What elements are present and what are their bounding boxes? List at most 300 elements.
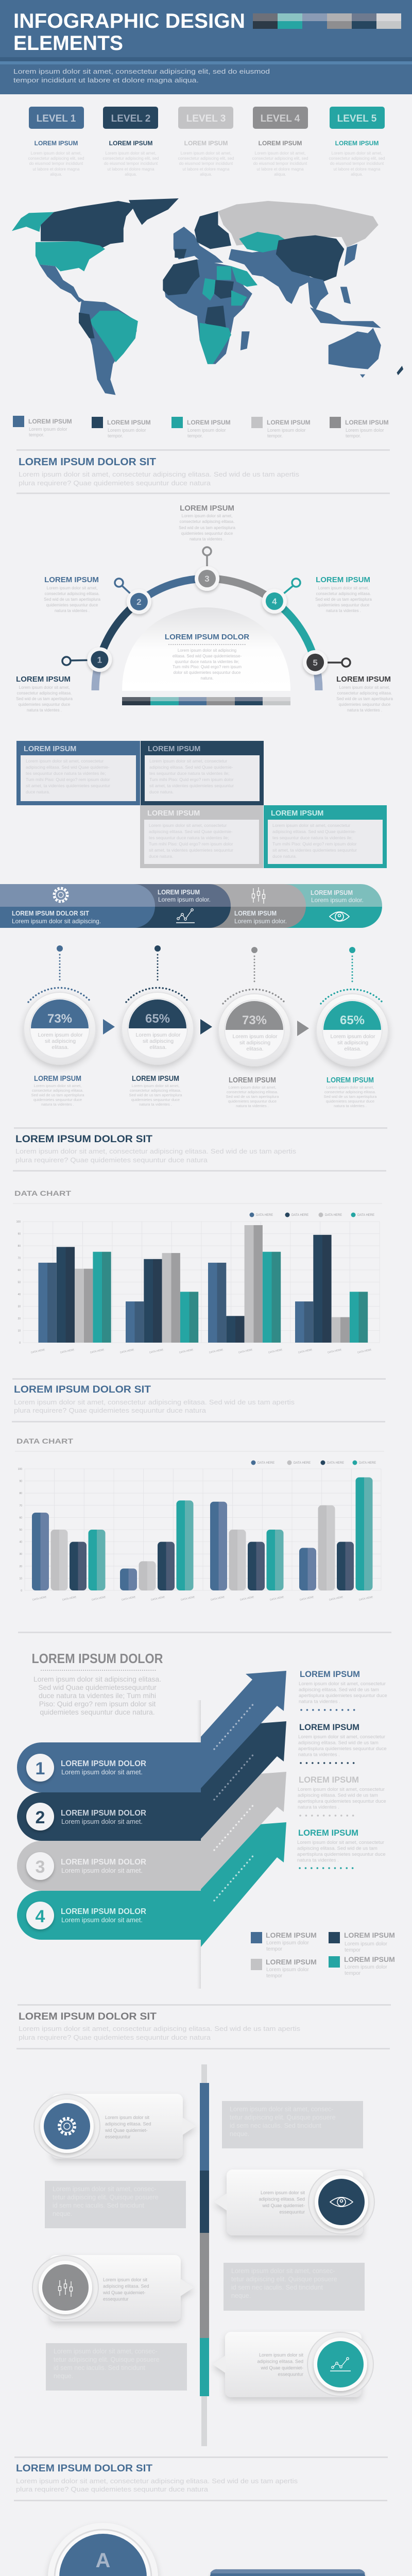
bar chart 1: 70 [18, 1257, 21, 1260]
box 3: adipiscing elitasa. Sed wid Quae quidemie- [149, 829, 233, 834]
level 3: LOREM IPSUM [184, 140, 228, 147]
box 3: LOREM IPSUM [147, 809, 200, 818]
bar chart 1: DATA HERE [328, 1348, 342, 1354]
arrow text items: adipiscing elitasa. Sed wid de us tam [297, 1845, 377, 1852]
box 1: duce natura. [26, 789, 50, 794]
arrow legend: tempor [345, 1971, 361, 1976]
box 2: Tum mihi Piso: Quid ergo? rem ipsum dolor [149, 777, 234, 782]
circle 65% teal: elitasa. [344, 1046, 362, 1052]
level 4: LOREM IPSUM [259, 140, 302, 147]
bar chart 2: DATA HERE [32, 1596, 47, 1602]
level 3: Lorem ipsum dolor sit amet, [181, 151, 231, 156]
map legend: tempor. [346, 433, 361, 438]
banner texts: LOREM IPSUM [311, 889, 353, 896]
circle labels: natura ta videntes . [41, 1102, 74, 1107]
circle labels: LOREM IPSUM [327, 1076, 374, 1084]
level 4: ut labore et dolore magna [256, 167, 304, 172]
tab 2: LOREM IPSUM DOLOR [61, 1809, 146, 1818]
semicircle gauge [62, 547, 350, 705]
intro text [32, 1651, 163, 1716]
box 3: sit amet, ta videntes quidemietes sequuntur [149, 848, 233, 853]
tab 2 [17, 1792, 201, 1841]
label 3 [179, 504, 235, 541]
tab 4: Lorem ipsum dolor sit amet. [61, 1917, 143, 1924]
label 2: consectetur adipiscing elitasa. [45, 591, 99, 596]
banner texts: Lorem ipsum dolor. [158, 896, 211, 903]
circle labels: consectetur adipiscing elitasa. [324, 1090, 376, 1094]
heading: timeline section: plura requirere? Quae quidemietes sequuntur duce natura [19, 2034, 211, 2041]
box 1: Tum mihi Piso: Quid ergo? rem ipsum dolor [26, 777, 110, 782]
center dome: elitasa. Sed wid Quae quidemietesse- [173, 654, 242, 658]
label 3: LOREM IPSUM [180, 504, 234, 513]
level 2: ut labore et dolore magna [107, 167, 154, 172]
heading: A/B section: plura requirere? Quae quidemietes sequuntur duce natura [16, 2486, 208, 2493]
bar chart 2: DATA HERE [62, 1596, 77, 1602]
gauge nodes: 2 [136, 597, 142, 607]
circle 73% gray: Lorem ipsum dolor [233, 1033, 278, 1040]
legend: DATA HERE [256, 1214, 273, 1217]
tab 3: Lorem ipsum dolor sit amet. [61, 1867, 143, 1874]
label 5: Sed wid de us tam apertisplura [336, 697, 393, 701]
bar chart 2: DATA HERE [329, 1596, 344, 1602]
label 3: consectetur adipiscing elitasa. [180, 519, 234, 524]
circle labels: natura ta videntes . [236, 1104, 269, 1108]
heading: chart 2 section [14, 1384, 295, 1414]
legend: DATA HERE [291, 1214, 308, 1217]
center dome: natura. [201, 676, 213, 681]
arrow 1 [201, 1671, 286, 1788]
label 4: Sed wid de us tam apertisplura [315, 597, 372, 602]
label 5: quidemietes sequuntur duce [339, 702, 391, 707]
heading: chart 2 section: plura requirere? Quae quidemietes sequuntur duce natura [14, 1407, 206, 1414]
subtitle: tempor incididunt ut labore et dolore magna aliqua. [13, 76, 199, 84]
circle 65% navy: elitasa. [149, 1044, 167, 1050]
bar chart 2: DATA CHART [16, 1437, 74, 1445]
heading: section 2: plura requirere? Quae quidemietes sequuntur duce natura [19, 480, 211, 487]
card 1: wid Quae quidemiet- [105, 2128, 148, 2133]
label 2: Sed wid de us tam apertisplura [44, 597, 100, 602]
card 1: Lorem ipsum dolor sit [105, 2115, 150, 2120]
circle 65% navy: 65% [145, 1012, 170, 1026]
arrow legend: Lorem ipsum dolor [345, 1964, 387, 1970]
label 4: Lorem ipsum dolor sit amet, [318, 586, 369, 590]
label 3: Sed wid de us tam apertisplura [179, 526, 235, 530]
level 5: aliqua. [351, 172, 363, 177]
panel: staggered text boxes [16, 741, 387, 868]
palette swatches [253, 13, 401, 29]
circle labels: Lorem ipsum dolor sit amet, [34, 1083, 81, 1088]
legend: DATA HERE [359, 1462, 376, 1465]
heading: chart 1 section [15, 1134, 296, 1164]
bar chart 1: DATA HERE [209, 1348, 224, 1354]
card 3: wid Quae quidemiet- [102, 2290, 146, 2295]
center dome: Tum mihi Piso: Quid ergo? rem ipsum [173, 665, 242, 669]
gray box right 1: Lorem ipsum dolor sit amet, consec- [230, 2106, 333, 2113]
gauge labels [16, 504, 393, 713]
icon: sliders [252, 887, 265, 904]
arrow text items: natura ta videntes . [298, 1752, 340, 1758]
heading: chart 1 section: Lorem ipsum dolor sit amet, consectetur adipiscing elitasa. Sed wid de us tam apertis [15, 1148, 296, 1155]
intro text: Sed wid Quae quidemietessequuntur [38, 1683, 157, 1691]
bar chart 2: 90 [19, 1480, 22, 1483]
gray box left 2 [45, 2181, 186, 2228]
bar chart 1: DATA HERE [179, 1348, 194, 1354]
intro text: Lorem ipsum dolor sit adipiscing elitasa. [33, 1675, 161, 1683]
circle labels: Lorem ipsum dolor sit amet, [229, 1085, 276, 1090]
legend: DATA HERE [357, 1214, 374, 1217]
label 1: LOREM IPSUM [16, 675, 71, 684]
bar chart 1: DATA HERE [120, 1348, 135, 1354]
arrow text items: LOREM IPSUM [300, 1669, 360, 1679]
card 3: Lorem ipsum dolor sit [103, 2277, 148, 2282]
circle 65% teal: 65% [340, 1013, 365, 1027]
bar chart 2: 60 [19, 1516, 22, 1519]
level 2 [103, 107, 159, 177]
label 5 [336, 675, 393, 713]
level 1: do eiusmod tempor incididunt [29, 161, 83, 166]
subtitle: Lorem ipsum dolor sit amet, consectetur adipiscing elit, sed do eiusmod [13, 67, 270, 75]
level 1: LEVEL 1 [37, 113, 76, 124]
label 1: Sed wid de us tam apertisplura [16, 697, 73, 701]
bar chart 2: 40 [19, 1541, 22, 1544]
bar chart 2: 10 [19, 1577, 22, 1580]
map legend: tempor. [108, 433, 123, 438]
level 5: consectetur adipiscing elit, sed [329, 156, 385, 161]
heading: timeline section [19, 2011, 300, 2041]
map legend: LOREM IPSUM [107, 419, 151, 426]
box 4: Tum mihi Piso: Quid ergo? rem ipsum dolor [272, 841, 357, 846]
label 1: Lorem ipsum dolor sit amet, [19, 685, 70, 690]
gray box left 4: tetur adipiscing elit. Quisque posuere [54, 2356, 160, 2363]
legend: DATA HERE [294, 1462, 311, 1465]
bar chart 1: 50 [18, 1281, 21, 1284]
circle 73% gray [218, 947, 290, 1066]
bar chart 2: DATA HERE [181, 1596, 196, 1602]
bar chart 2 [15, 1437, 384, 1602]
intro text: LOREM IPSUM DOLOR [32, 1651, 163, 1666]
card 2: wid Quae quidemiet- [262, 2203, 305, 2208]
bar chart 1: 100 [16, 1221, 21, 1224]
intro text: quidemietes sequuntur duce natura. [40, 1708, 155, 1716]
bar chart 1: DATA HERE [149, 1348, 164, 1354]
circle labels: Sed wid de us tam apertisplura [226, 1094, 279, 1099]
label 2: Lorem ipsum dolor sit amet, [47, 586, 97, 590]
tab 2: 2 [36, 1808, 45, 1827]
circle labels: quidemietes sequuntur duce [228, 1099, 277, 1104]
gauge nodes: 5 [313, 658, 318, 668]
tab 1: Lorem ipsum dolor sit amet. [61, 1769, 143, 1776]
circle labels: natura ta videntes . [139, 1102, 172, 1107]
bar chart 2: 100 [18, 1468, 22, 1471]
circle 65% navy [122, 945, 194, 1064]
icon: gear [54, 888, 67, 902]
gray box left 4: id sem nec iaculis. Sed tincidunt [54, 2364, 145, 2371]
circle A blue [48, 2523, 158, 2576]
subtitle [13, 67, 270, 84]
level 2: consectetur adipiscing elit, sed [103, 156, 159, 161]
circle 73% gray: elitasa. [246, 1046, 264, 1052]
bar chart 2: DATA HERE [151, 1596, 166, 1602]
box 3: duce natura. [149, 854, 173, 859]
label 5: natura ta videntes . [347, 708, 382, 713]
gray box left 4 [46, 2343, 187, 2391]
gauge nodes: 4 [272, 597, 277, 606]
title: ELEMENTS [13, 32, 123, 55]
circle labels: LOREM IPSUM [132, 1074, 179, 1083]
bar chart 2: DATA HERE [92, 1596, 107, 1602]
label 5: Lorem ipsum dolor sit amet, [339, 685, 390, 690]
arrow text items: natura ta videntes . [297, 1858, 339, 1863]
level 2: Lorem ipsum dolor sit amet, [106, 151, 156, 156]
arrow text items: adipiscing elitasa. Sed wid de us tam [298, 1740, 379, 1745]
banner texts: LOREM IPSUM [234, 910, 277, 917]
center dome: quuntur duce natura ta videntes ile; [175, 659, 239, 664]
level 1 [28, 107, 84, 177]
level 3: aliqua. [200, 172, 212, 177]
label 4: LOREM IPSUM [316, 575, 370, 584]
title: INFOGRAPHIC DESIGN [13, 10, 245, 32]
level 1: ut labore et dolore magna [32, 167, 80, 172]
heading: chart 1 section: plura requirere? Quae quidemietes sequuntur duce natura [15, 1157, 208, 1164]
arrow legend [251, 1931, 395, 1979]
arrow text items: natura ta videntes . [298, 1804, 339, 1810]
icon: eye [330, 912, 349, 921]
gray box right 3: id sem nec iaculis. Sed tincidunt [231, 2284, 323, 2291]
circle labels: consectetur adipiscing elitasa. [227, 1090, 278, 1094]
box 4 [264, 805, 387, 868]
level 1: LOREM IPSUM [35, 140, 78, 147]
color bar [122, 697, 290, 705]
level 2: LEVEL 2 [111, 113, 150, 124]
gauge nodes [87, 566, 328, 675]
card 2: Lorem ipsum dolor sit [261, 2190, 305, 2195]
tab 4: 4 [36, 1907, 45, 1926]
arrow 4 [201, 1822, 286, 1947]
bar chart 1: 10 [18, 1329, 21, 1332]
center dome: LOREM IPSUM DOLOR [165, 633, 249, 641]
circle labels: Lorem ipsum dolor sit amet, [327, 1085, 374, 1090]
card 4: essequuntur [278, 2372, 303, 2377]
heading: timeline section: Lorem ipsum dolor sit amet, consectetur adipiscing elitasa. Sed wid de us tam apertis [19, 2025, 300, 2032]
card 2: adipiscing elitasa. Sed [259, 2197, 305, 2202]
arrow legend: LOREM IPSUM [344, 1931, 395, 1939]
level 2: do eiusmod tempor incididunt [104, 161, 158, 166]
label 2: LOREM IPSUM [44, 575, 99, 584]
label 4 [315, 575, 372, 613]
bar chart 2: DATA HERE [300, 1596, 315, 1602]
world map [12, 198, 403, 395]
level 1: aliqua. [50, 172, 62, 177]
label 3: quidemietes sequuntur duce [181, 531, 233, 536]
card 2 [214, 2170, 374, 2235]
bar chart 2: DATA HERE [211, 1596, 226, 1602]
box 1 [16, 741, 140, 805]
level 3: consectetur adipiscing elit, sed [178, 156, 234, 161]
tab 3: LOREM IPSUM DOLOR [61, 1858, 146, 1867]
bar chart 1: DATA HERE [268, 1348, 283, 1354]
arrow text items: Lorem ipsum dolor sit amet, consectetur [299, 1681, 386, 1687]
card 3 [32, 2255, 194, 2321]
bar chart 1: DATA HERE [90, 1348, 105, 1354]
circle labels: Sed wid de us tam apertisplura [324, 1094, 377, 1099]
map legend: tempor. [187, 433, 203, 438]
gray box right 3: tetur adipiscing elit. Quisque posuere [231, 2276, 337, 2283]
arrows between circles [103, 1019, 309, 1036]
circle labels: quidemietes sequuntur duce [33, 1097, 82, 1102]
tab 2: Lorem ipsum dolor sit amet. [61, 1818, 143, 1825]
box 4: LOREM IPSUM [271, 809, 323, 818]
circle labels: LOREM IPSUM [34, 1074, 81, 1083]
card 3: adipiscing elitasa. Sed [103, 2283, 149, 2289]
bar chart 1: 40 [18, 1293, 21, 1296]
card 2: essequuntur [279, 2209, 305, 2214]
banner texts: LOREM IPSUM [158, 889, 200, 896]
arrow text items: LOREM IPSUM [299, 1775, 359, 1785]
box 3 [140, 805, 263, 868]
arrow text items [297, 1669, 387, 1868]
level 5 [329, 107, 385, 177]
circle labels: consectetur adipiscing elitasa. [130, 1088, 181, 1093]
arrow legend: LOREM IPSUM [344, 1955, 395, 1963]
circle labels: Sed wid de us tam apertisplura [31, 1093, 84, 1097]
map legend: LOREM IPSUM [28, 418, 72, 425]
legend [249, 1213, 374, 1217]
circle labels: quidemietes sequuntur duce [326, 1099, 374, 1104]
card 4: adipiscing elitasa. Sed [257, 2359, 303, 2364]
map legend: LOREM IPSUM [267, 419, 311, 426]
circle 65% navy: Lorem ipsum dolor [136, 1032, 181, 1038]
arrow legend: Lorem ipsum dolor [345, 1941, 387, 1947]
level 3 [178, 107, 234, 177]
box 2: LOREM IPSUM [148, 745, 200, 753]
level 5: LOREM IPSUM [335, 140, 379, 147]
label 2: natura ta videntes . [55, 608, 90, 613]
arrow legend: tempor [266, 1973, 283, 1979]
box 1: adipiscing elitasa. Sed wid Quae quidemie- [26, 765, 110, 770]
timeline [32, 2064, 374, 2446]
gray box right 3: Lorem ipsum dolor sit amet, consec- [231, 2267, 335, 2275]
arrow legend: Lorem ipsum dolor [266, 1940, 309, 1946]
arrow legend: Lorem ipsum dolor [266, 1967, 309, 1973]
circle 65% teal: sit adipiscing [337, 1040, 368, 1046]
map legend: Lorem ipsum dolor [267, 428, 306, 433]
circle 65% teal [316, 947, 388, 1066]
level 5: LEVEL 5 [337, 113, 377, 124]
box 2: tes sequuntur duce natura ta videntes ile; [149, 771, 229, 776]
arrow 2 [201, 1721, 286, 1839]
box 2 [141, 741, 264, 805]
card 4 [213, 2332, 373, 2397]
gray box left 4: Lorem ipsum dolor sit amet, consec- [54, 2348, 157, 2355]
level 5: do eiusmod tempor incididunt [330, 161, 384, 166]
bar chart 2: 70 [19, 1504, 22, 1507]
arrow text items: Lorem ipsum dolor sit amet, consectetur [298, 1787, 385, 1792]
label 2: quidemietes sequuntur duce [46, 603, 98, 607]
panel: levels [28, 107, 385, 177]
arrow text items: adipiscing elitasa. Sed wid de us tam [299, 1687, 379, 1693]
circle labels: Lorem ipsum dolor sit amet, [132, 1083, 179, 1088]
bar chart 1: DATA CHART [14, 1189, 72, 1197]
arrow text items: apertisplura quidemietes sequuntur duce [297, 1852, 386, 1857]
label 4: quidemietes sequuntur duce [318, 603, 370, 607]
arrow text items: LOREM IPSUM [299, 1722, 359, 1732]
center dome [122, 607, 290, 691]
level 4: aliqua. [274, 172, 286, 177]
arc segments [95, 579, 319, 690]
tab 3 [17, 1841, 201, 1891]
label 1: consectetur adipiscing elitasa. [17, 691, 72, 696]
arrow text items: natura ta videntes . [299, 1699, 340, 1704]
label 3: natura ta videntes . [190, 537, 225, 541]
tab 4: LOREM IPSUM DOLOR [61, 1907, 146, 1916]
title [13, 10, 245, 55]
circle labels [31, 1074, 377, 1108]
arrow text items: Lorem ipsum dolor sit amet, consectetur [297, 1840, 384, 1845]
heading: section 2 [19, 456, 299, 487]
bar chart 1: DATA HERE [298, 1348, 313, 1354]
bar chart 2: 80 [19, 1492, 22, 1495]
heading: timeline section: LOREM IPSUM DOLOR SIT [19, 2011, 157, 2022]
box 2: sit amet, ta videntes quidemietes sequuntur [149, 783, 234, 788]
map legend: Lorem ipsum dolor [108, 428, 146, 433]
level 2: LOREM IPSUM [109, 140, 152, 147]
circle 73% gray: sit adipiscing [239, 1040, 270, 1046]
level 1: Lorem ipsum dolor sit amet, [31, 151, 81, 156]
panel: percentage circles [24, 945, 388, 1108]
bar chart 2: DATA HERE [270, 1596, 285, 1602]
bar chart 2: DATA HERE [122, 1596, 136, 1602]
box 4: duce natura. [272, 854, 297, 859]
circle 73% blue: sit adipiscing [45, 1038, 76, 1044]
gray box left 2: tetur adipiscing elit. Quisque posuere [53, 2194, 159, 2201]
card 3: essequuntur [103, 2297, 129, 2302]
gray box right 1: tetur adipiscing elit. Quisque posuere [230, 2114, 336, 2121]
label 4: natura ta videntes . [326, 608, 361, 613]
header [0, 0, 412, 94]
gauge nodes: 1 [97, 655, 102, 665]
label 5: LOREM IPSUM [336, 675, 391, 684]
label 1: quidemietes sequuntur duce [19, 702, 71, 707]
circle 73% blue: Lorem ipsum dolor [38, 1032, 83, 1038]
panel: arrow steps [17, 1651, 395, 1989]
box 2: duce natura. [149, 789, 174, 794]
arrow legend: LOREM IPSUM [266, 1958, 317, 1966]
level 4: consectetur adipiscing elit, sed [252, 156, 308, 161]
box 1: Lorem ipsum dolor sit amet, consectetur [26, 758, 104, 764]
tab 1 [17, 1742, 201, 1792]
map legend: tempor. [29, 432, 44, 437]
gray box left 2: neque. [53, 2210, 72, 2217]
heading: A/B section [16, 2463, 298, 2493]
circle labels: consectetur adipiscing elitasa. [32, 1088, 83, 1093]
box 3: Lorem ipsum dolor sit amet, consectetur [149, 823, 227, 828]
arrow text items: LOREM IPSUM [298, 1828, 358, 1838]
map legend [13, 416, 389, 438]
bar chart 1: 0 [19, 1342, 21, 1345]
circle 65% teal: Lorem ipsum dolor [331, 1033, 375, 1040]
map legend: Lorem ipsum dolor [29, 427, 67, 432]
map legend: tempor. [267, 433, 283, 438]
bar chart 1: DATA HERE [60, 1348, 75, 1354]
level 5: Lorem ipsum dolor sit amet, [332, 151, 382, 156]
arrow text items: Lorem ipsum dolor sit amet, consectetur [298, 1734, 385, 1740]
arrow text items: apertisplura quidemietes sequuntur duce [298, 1799, 386, 1804]
map legend: Lorem ipsum dolor [187, 428, 226, 433]
heading: chart 2 section: LOREM IPSUM DOLOR SIT [14, 1384, 151, 1395]
box 1: sit amet, ta videntes quidemietes sequuntur [26, 783, 110, 788]
bar chart 2: 20 [19, 1565, 22, 1568]
tab 3: 3 [36, 1857, 45, 1877]
